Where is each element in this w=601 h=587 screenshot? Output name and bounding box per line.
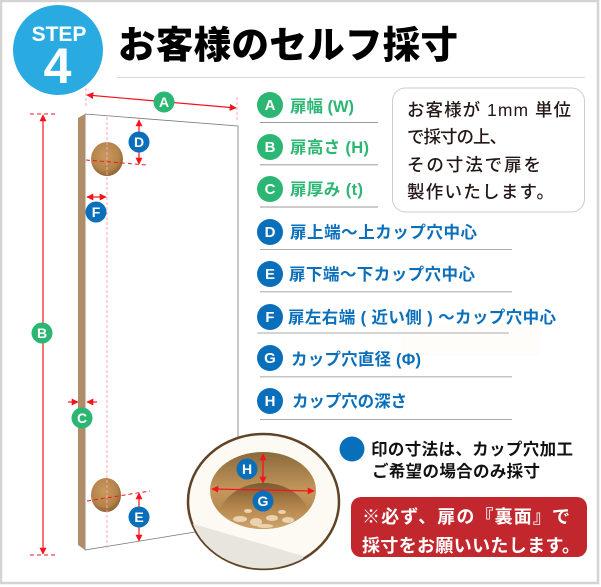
note box: 製作いたします。 — [407, 182, 554, 202]
marker H — [236, 458, 258, 480]
warning callout: 採寸をお願いいたします。 — [362, 536, 580, 556]
list item A: 扉幅 (W) — [290, 97, 354, 116]
list item G: G — [264, 350, 276, 367]
centre lines — [30, 114, 150, 555]
marker C — [72, 408, 92, 428]
list item F: 扉左右端 ( 近い側 ) ～カップ穴中心 — [288, 308, 556, 327]
title rule — [117, 77, 585, 78]
marker G — [252, 490, 274, 512]
list item B — [257, 134, 378, 166]
list item D: D — [265, 224, 276, 241]
list item F: F — [265, 309, 275, 326]
list item C — [257, 176, 378, 208]
marker F — [86, 202, 106, 222]
list item C: 扉厚み (t) — [290, 181, 363, 199]
marker E: E — [134, 509, 144, 525]
marker D — [128, 132, 150, 152]
list item C: C — [265, 181, 276, 198]
list item H — [257, 388, 512, 420]
blue dot legend — [340, 436, 573, 481]
guide lines — [86, 88, 237, 548]
step badge: 4 — [44, 38, 72, 94]
arrow H — [262, 454, 264, 483]
bottom cup hole — [91, 478, 121, 512]
door edge — [78, 114, 85, 550]
step badge — [13, 5, 103, 95]
list item E: 扉下端～下カップ穴中心 — [289, 265, 476, 284]
arrows — [43, 95, 236, 554]
list item G: カップ穴直径 (Φ) — [291, 350, 421, 369]
list item A — [257, 92, 378, 123]
list item D: 扉上端～上カップ穴中心 — [290, 223, 478, 242]
door panel — [85, 114, 238, 550]
note box: で採寸の上、 — [407, 127, 507, 147]
list item E: E — [265, 266, 275, 283]
step badge: STEP — [32, 23, 86, 46]
hole bottom dome — [219, 483, 308, 529]
warning callout — [351, 497, 587, 557]
list item F — [257, 304, 556, 334]
marker G: G — [258, 493, 269, 509]
door underside — [192, 524, 304, 568]
note box: お客様が 1mm 単位 — [407, 100, 571, 120]
marker A: A — [159, 94, 169, 110]
list item E — [257, 261, 512, 292]
marker B: B — [37, 325, 47, 341]
list item H: H — [265, 393, 275, 410]
list item A: A — [265, 97, 276, 114]
note box: その寸法で扉を — [407, 155, 541, 175]
marker E — [128, 506, 150, 528]
note box — [392, 88, 584, 212]
list item B: 扉高さ (H) — [290, 137, 369, 157]
blue dot legend: 印の寸法は、カップ穴加工 — [371, 439, 573, 459]
list item H: カップ穴の深さ — [292, 392, 407, 411]
marker D: D — [134, 134, 144, 150]
marker H: H — [242, 461, 252, 477]
warning callout: ※必ず、扉の『裏面』で — [362, 507, 570, 527]
marker C: C — [77, 410, 87, 426]
list item B: B — [265, 139, 276, 156]
blue dot legend: ご希望の場合のみ採寸 — [372, 461, 540, 481]
list item G — [257, 345, 512, 378]
door diagram — [30, 88, 238, 555]
hole — [210, 452, 316, 529]
top cup hole — [91, 142, 123, 176]
wood chips — [233, 509, 294, 528]
marker F: F — [92, 204, 101, 220]
title: お客様のセルフ採寸 — [118, 24, 458, 66]
list item D — [257, 219, 512, 250]
detail circle — [180, 434, 339, 580]
marker B — [32, 322, 52, 344]
arrow G — [212, 489, 314, 491]
marker A — [154, 92, 174, 112]
